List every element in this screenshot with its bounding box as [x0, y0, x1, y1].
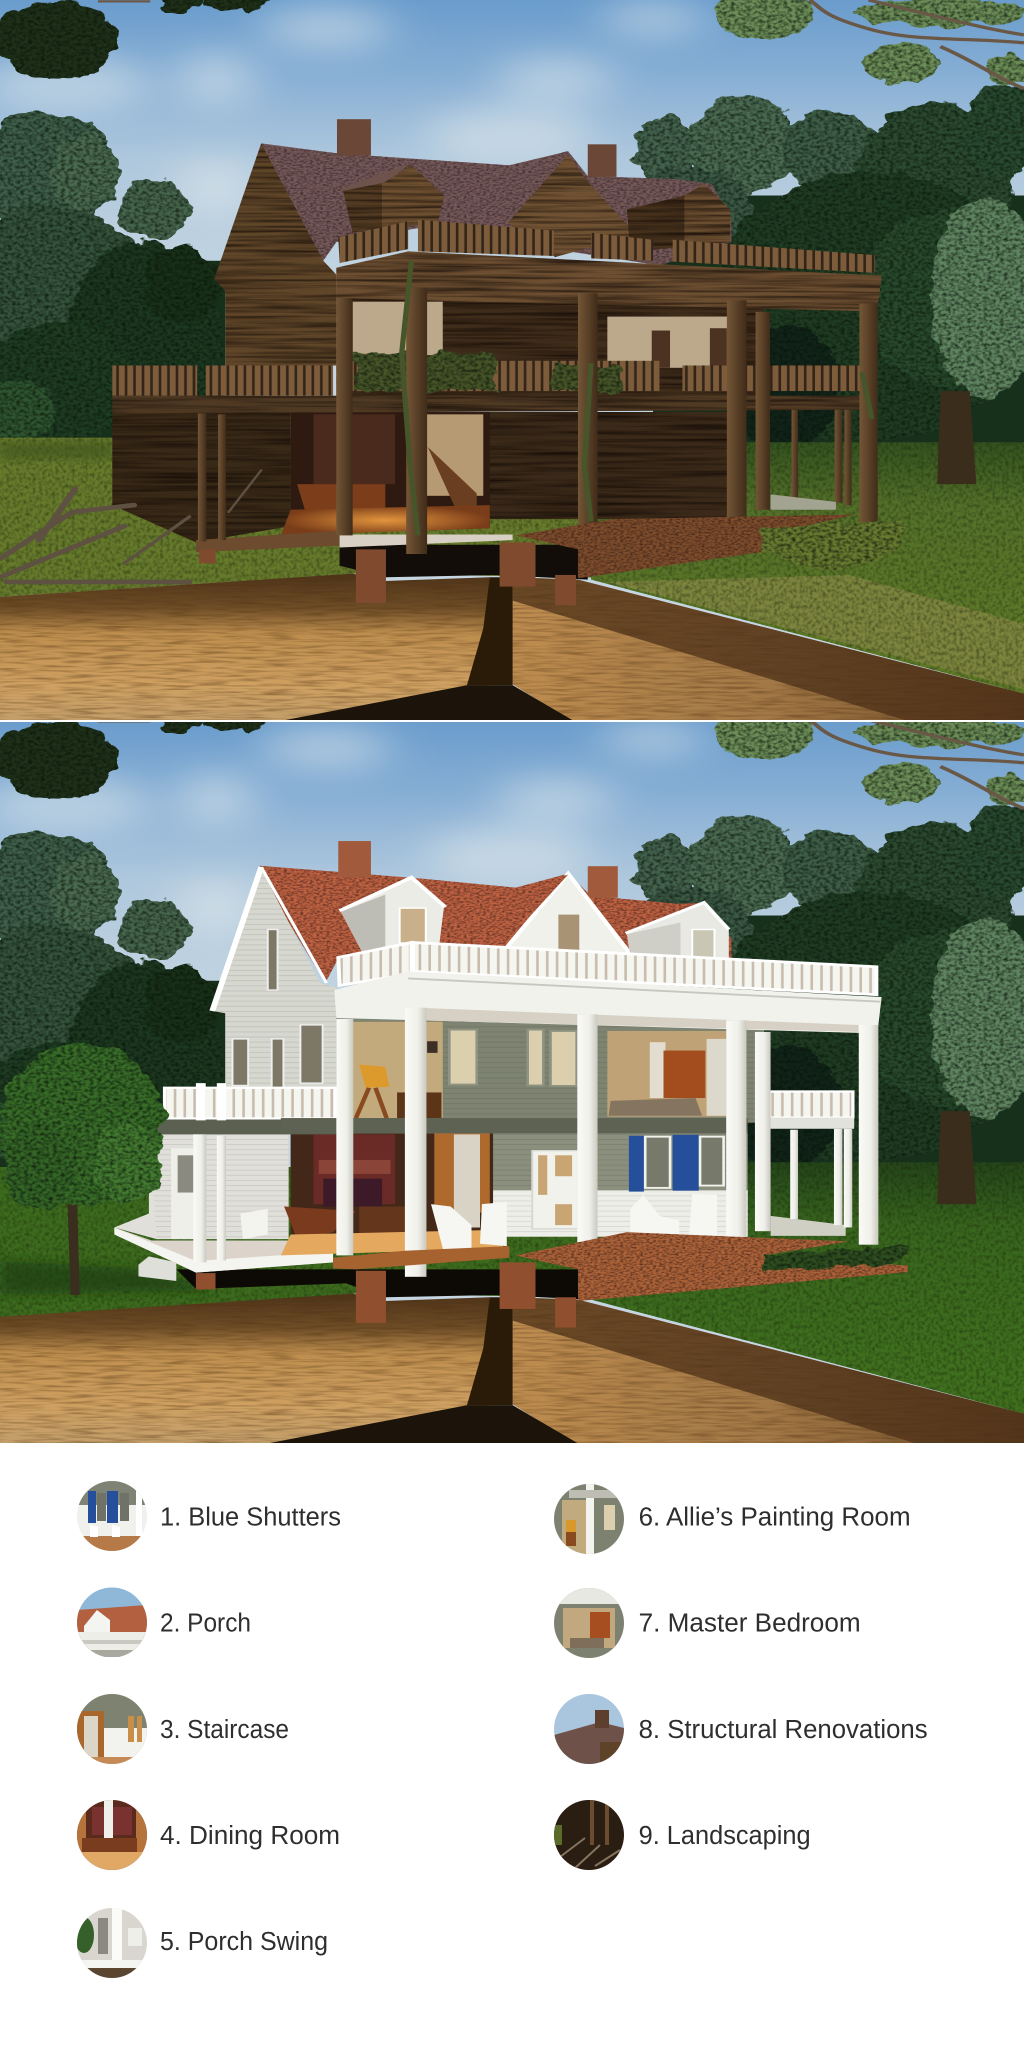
chimneys	[338, 841, 618, 898]
columns	[198, 288, 878, 554]
legend item 6: painting room	[554, 1484, 911, 1554]
icon: painting room thumbnail	[554, 1484, 624, 1554]
side steps	[138, 1256, 176, 1281]
gable wall	[212, 869, 336, 1088]
upper wall	[336, 1009, 764, 1123]
adirondack chairs	[431, 1194, 717, 1253]
front tree	[0, 1044, 163, 1295]
icon: landscaping thumbnail	[554, 1800, 624, 1870]
label: 3. Staircase	[160, 1716, 289, 1744]
sky and background trees	[0, 0, 1024, 731]
left balcony	[150, 1083, 336, 1134]
painting room	[353, 1022, 443, 1118]
roof	[260, 866, 731, 985]
columns	[193, 1008, 878, 1277]
legend item 5: porch swing	[74, 1908, 328, 1978]
label: 2. Porch	[160, 1610, 251, 1638]
panel: legend	[74, 1481, 928, 1978]
shadow on grass	[0, 442, 112, 459]
side windows	[232, 930, 323, 1088]
label: 6. Allie’s Painting Room	[639, 1504, 911, 1532]
upper wall	[336, 289, 764, 400]
roof railing	[338, 220, 875, 273]
roof railing	[338, 943, 876, 995]
right tree trunk	[937, 391, 976, 484]
deck floor bands	[196, 531, 513, 552]
shadow on lawn	[0, 1260, 216, 1295]
soil cross-section	[0, 574, 1024, 731]
deck band	[112, 396, 875, 413]
legend item 2: porch	[77, 1587, 251, 1657]
icon: roof and chimney thumbnail	[554, 1694, 624, 1764]
icon: staircase thumbnail	[77, 1694, 147, 1764]
upper doors	[652, 328, 727, 368]
dining room interior	[281, 412, 490, 535]
label: 7. Master Bedroom	[639, 1610, 861, 1638]
label: 5. Porch Swing	[160, 1928, 328, 1956]
brick terrace	[333, 1232, 908, 1301]
vines on columns	[402, 261, 872, 535]
icon: porch thumbnail	[77, 1587, 147, 1657]
legend item 7: master bedroom	[554, 1588, 861, 1658]
second floor railing	[112, 361, 875, 396]
lawn	[0, 1162, 1024, 1414]
door lights	[538, 1155, 572, 1225]
roof	[261, 143, 731, 265]
blue shutters	[629, 1135, 699, 1192]
plaster rooms	[353, 302, 728, 368]
icon: blue shutters thumbnail	[77, 1481, 147, 1551]
legend item 4: dining room	[77, 1800, 340, 1870]
under-house shadow	[176, 1269, 588, 1300]
label: 4. Dining Room	[160, 1822, 340, 1850]
entablature	[334, 971, 882, 1033]
legend item 8: structural renovations	[554, 1694, 928, 1764]
icon: porch swing thumbnail	[74, 1908, 147, 1978]
dormers	[341, 155, 730, 257]
lower right wall	[490, 1130, 748, 1237]
dormer roof	[556, 151, 567, 154]
legend item 3: staircase	[77, 1694, 289, 1764]
soil cross-section	[0, 1294, 1024, 1451]
panel: before, derelict wooden house	[0, 0, 1024, 731]
gable wall	[214, 143, 336, 365]
vines on railing	[353, 354, 620, 391]
mid floor band	[281, 1118, 748, 1133]
porch swing wall	[114, 1133, 333, 1273]
under-house shadow	[340, 545, 588, 580]
legend item 1: blue shutters	[77, 1481, 341, 1551]
dining room	[281, 1133, 503, 1255]
overgrown bushes	[761, 521, 904, 573]
label: 9. Landscaping	[639, 1822, 811, 1850]
lower windows	[645, 1137, 724, 1188]
right tree trunk	[937, 1111, 976, 1204]
label: 1. Blue Shutters	[160, 1504, 341, 1532]
entablature	[336, 251, 882, 311]
brick piers	[199, 542, 576, 605]
chimneys	[337, 119, 616, 177]
overgrown grass	[0, 438, 1024, 694]
dormers	[340, 874, 729, 960]
hedge	[765, 1245, 904, 1273]
fallen branches	[0, 470, 261, 582]
brick terrace	[516, 514, 856, 578]
lower walls	[112, 410, 291, 542]
restored house	[0, 841, 908, 1328]
panel: after, restored white house	[0, 708, 1024, 1451]
master bedroom	[607, 1031, 726, 1117]
brick piers	[196, 1262, 576, 1328]
legend item 9: landscaping	[554, 1800, 811, 1870]
label: 8. Structural Renovations	[639, 1716, 928, 1744]
sky and background trees	[0, 708, 1024, 1451]
front door	[532, 1151, 578, 1229]
icon: dining room thumbnail	[77, 1800, 147, 1870]
icon: master bedroom thumbnail	[554, 1588, 624, 1658]
wooden house	[0, 119, 904, 605]
right balcony	[769, 1092, 854, 1236]
upper windows	[449, 1030, 577, 1086]
back porch floor	[771, 494, 836, 510]
